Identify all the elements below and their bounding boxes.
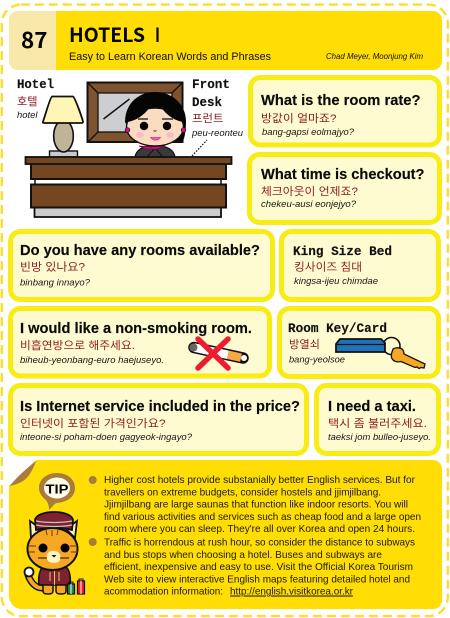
gift bags [68,579,84,594]
bullet: traffic text: Traffic is horrendous at rush hour, so consider the distance to subways [104,538,415,549]
bullet: hostels text: travellers on extreme budgets, consider hostels and jjimjilbang. [104,488,381,498]
card: internet service [10,386,306,454]
speech bubble: TIP: TIP [46,482,69,496]
authors: Chad Meyer, Moonjung Kim [326,52,423,61]
bullet: hostels text: Jjimjilbang are large saunas that function like indoor resorts. You will [104,500,408,511]
card: room rate: 방값이 얼마죠? [261,111,336,125]
ears [30,521,77,538]
jacket [39,567,70,585]
speech bubble: TIP [39,473,75,510]
bullet: traffic text: efficient, inexpensive and easy to use. Visit the Official Korea Tourism [104,562,413,573]
card: internet service: Is Internet service included in the price? [20,398,300,415]
lesson number: 87 [21,23,48,55]
bullet: traffic text: acommodation information: [104,586,223,598]
bullet: traffic text: http://english.visitkorea.or.kr [230,586,354,598]
card: room key [280,308,438,376]
bullet: traffic text: and bus stops when choosing a hotel. Buses and subways are [104,550,382,561]
card: checkout: What time is checkout? [261,166,424,183]
picture frame [88,82,182,142]
panel: tip [9,460,442,609]
folded corner [10,461,36,486]
card: non-smoking room: 비흡연방으로 해주세요. [20,338,135,352]
card: rooms available: binbang innayo? [20,278,91,288]
card: room rate [250,78,440,145]
cat bellhop mascot [24,512,84,594]
receptionist [125,92,186,157]
header banner [9,11,442,70]
card: rooms available: Do you have any rooms available? [20,242,260,259]
bullet: traffic text [89,538,415,598]
card: internet service: inteone-si poham-doen gagyeok-ingayo? [20,432,193,442]
card: rooms available [10,232,272,300]
label: hotel: 호텔 [17,95,38,108]
card: rooms available: 빈방 있나요? [20,260,85,274]
head [28,528,78,570]
cap [35,512,73,530]
pointer line [192,140,207,156]
title: HOTELS [69,19,145,48]
card: room rate: bang-gapsi eolmajyo? [262,127,355,137]
label: hotel [17,78,54,120]
card: checkout [250,154,440,222]
icon: crossed-out cigarette [190,339,247,368]
label: front desk [191,78,243,138]
bullet: hostels text: Higher cost hotels provide substanially better English services. But for [104,475,416,486]
card: non-smoking room [10,308,270,376]
subtitle: Easy to Learn Korean Words and Phrases [69,51,272,63]
card: room key: 방열쇠 [289,338,320,351]
card: taxi [316,386,438,454]
bullet: traffic text: Web site to view interactive English maps featuring detailed hotel and [104,574,410,586]
legs [43,583,66,594]
bullet: hostels text: find various activities and services such as cheap food and a large open [104,512,421,523]
card: internet service: 인터넷이 포함된 가격인가요? [20,417,166,430]
card: room key: bang-yeolsoe [289,354,345,364]
card: checkout: 체크아웃이 언제죠? [261,185,358,198]
bullet: hostels text: room where you can sleep. They're all over Korea and open 24 hours. [104,524,415,535]
card: king size bed: King Size Bed [293,245,392,259]
label: front desk: peu-reonteu [191,128,243,138]
card: room key: Room Key/Card [288,322,387,336]
card: king size bed [282,232,438,300]
card: checkout: chekeu-ausi eonjejyo? [261,199,357,209]
label: front desk: Desk [192,96,222,110]
lamp [43,96,83,157]
tail [28,575,42,588]
label: front desk: 프런트 [192,112,224,125]
label: hotel: hotel [17,110,38,120]
card: taxi: taeksi jom bulleo-juseyo. [328,432,431,442]
card: taxi: 택시 좀 불러주세요. [328,417,427,430]
bullet: hostels text [89,475,421,535]
card: king size bed: 킹사이즈 침대 [294,260,362,274]
title numeral: I [155,19,160,48]
label: front desk: Front [192,78,230,92]
icon: key and card [336,338,425,368]
card: room rate: What is the room rate? [261,92,420,109]
label: hotel: Hotel [17,78,54,92]
card: king size bed: kingsa-ijeu chimdae [294,276,378,286]
card: non-smoking room: biheub-yeonbang-euro haejuseyo. [20,355,164,365]
panel: front desk illustration [17,78,243,217]
reception desk [26,157,232,217]
card: non-smoking room: I would like a non-smoking room. [20,320,252,337]
card: taxi: I need a taxi. [328,398,416,415]
